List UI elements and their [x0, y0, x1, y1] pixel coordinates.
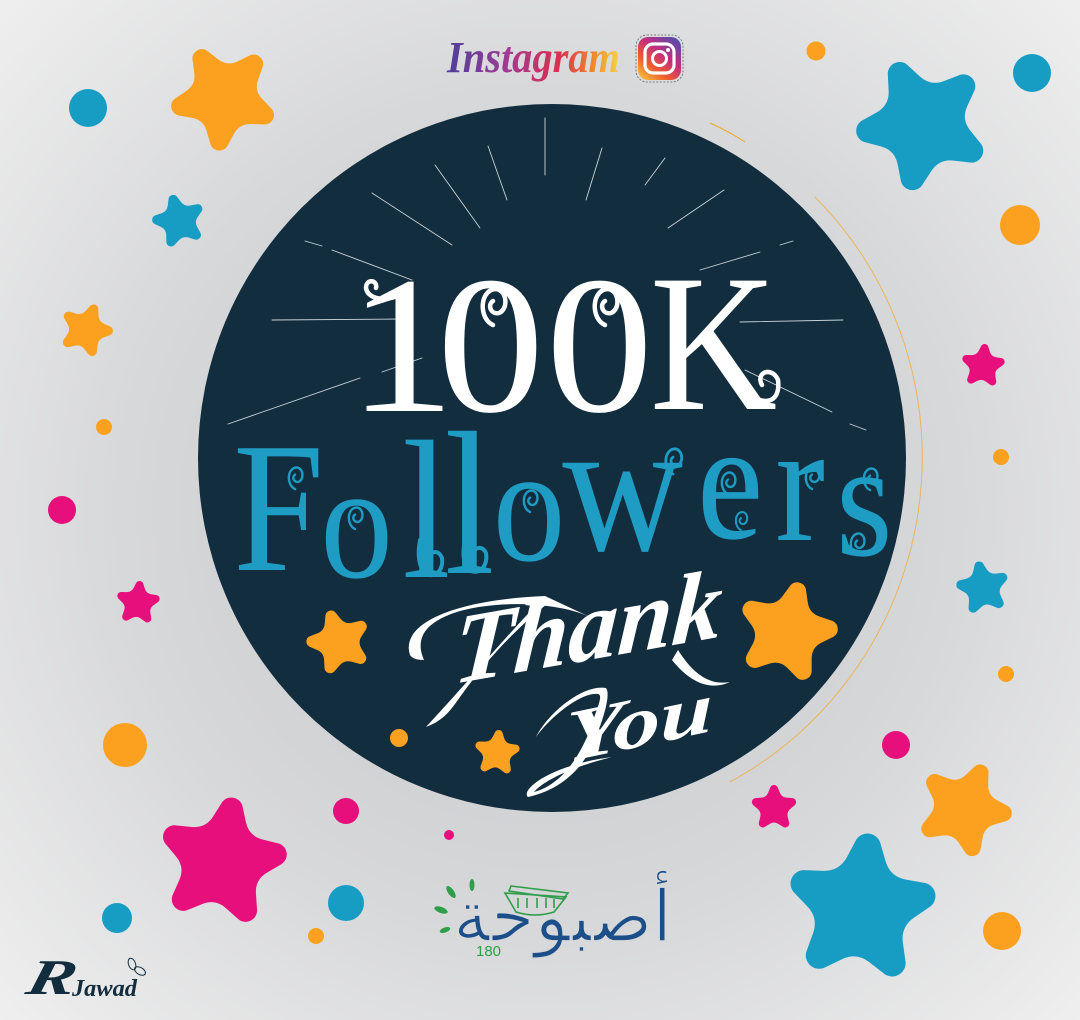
heading: Followers: o: [320, 430, 393, 613]
heading: Followers: s: [836, 408, 893, 591]
heading: Followers: w: [562, 381, 683, 591]
panel: dark circle: [198, 104, 906, 812]
thin orange arc around the circle: [710, 123, 922, 782]
decorative swirls on the Followers letters: [289, 449, 877, 575]
decorative swirls on the heading numerals: [366, 281, 778, 401]
heading: Followers: F: [233, 404, 324, 610]
star: pink small bottom: [752, 785, 796, 827]
heading: Followers: e: [697, 386, 763, 575]
heading: Followers: l: [402, 402, 451, 621]
logo wordmark: أصبوحة: [453, 870, 672, 959]
star: orange left of Thank: [300, 602, 377, 677]
signature: RJawad: Jawad: [71, 976, 138, 1002]
text: Thank You: Thank: [450, 547, 726, 706]
heading: Followers: o: [493, 413, 565, 596]
sunburst rays: [228, 118, 866, 430]
star: blue top right: [836, 36, 1005, 203]
logo leaves: [433, 879, 474, 934]
signature: RJawad: [20, 950, 147, 1005]
signature: RJawad: R: [20, 950, 84, 1005]
star: orange small left: [54, 296, 119, 360]
heading: 100K: K: [650, 236, 777, 452]
heading: Followers: l: [444, 390, 495, 618]
heading: Followers: [233, 381, 893, 621]
logo building: [505, 886, 568, 915]
text: Thank You: You: [566, 665, 713, 778]
dot: orange: [390, 729, 408, 747]
star: pink small left: [115, 579, 161, 623]
star: orange top left: [152, 25, 291, 162]
star: orange bottom right: [905, 746, 1026, 865]
icon: Instagram: [636, 35, 683, 82]
logo number: 180: [476, 943, 501, 960]
star: orange below Thank: [473, 728, 521, 774]
icon: butterfly: [127, 957, 147, 977]
stars and dot inside the circle: [300, 571, 847, 774]
star: blue small left: [147, 188, 210, 250]
star: pink large bottom left: [151, 787, 295, 927]
heading: 100K: 100: [348, 236, 653, 454]
logo: Asbuha 180: [433, 870, 672, 960]
star: pink right: [960, 342, 1006, 386]
swashes on the Thank You lettering: [409, 596, 730, 797]
heading: Followers: r: [775, 388, 825, 577]
logo: Instagram wordmark: Instagram: [446, 33, 620, 82]
star: blue small right: [953, 557, 1012, 615]
star: blue large bottom right: [782, 826, 941, 980]
text: Thank You: [409, 547, 730, 797]
star: orange right of Thank: [729, 571, 847, 685]
